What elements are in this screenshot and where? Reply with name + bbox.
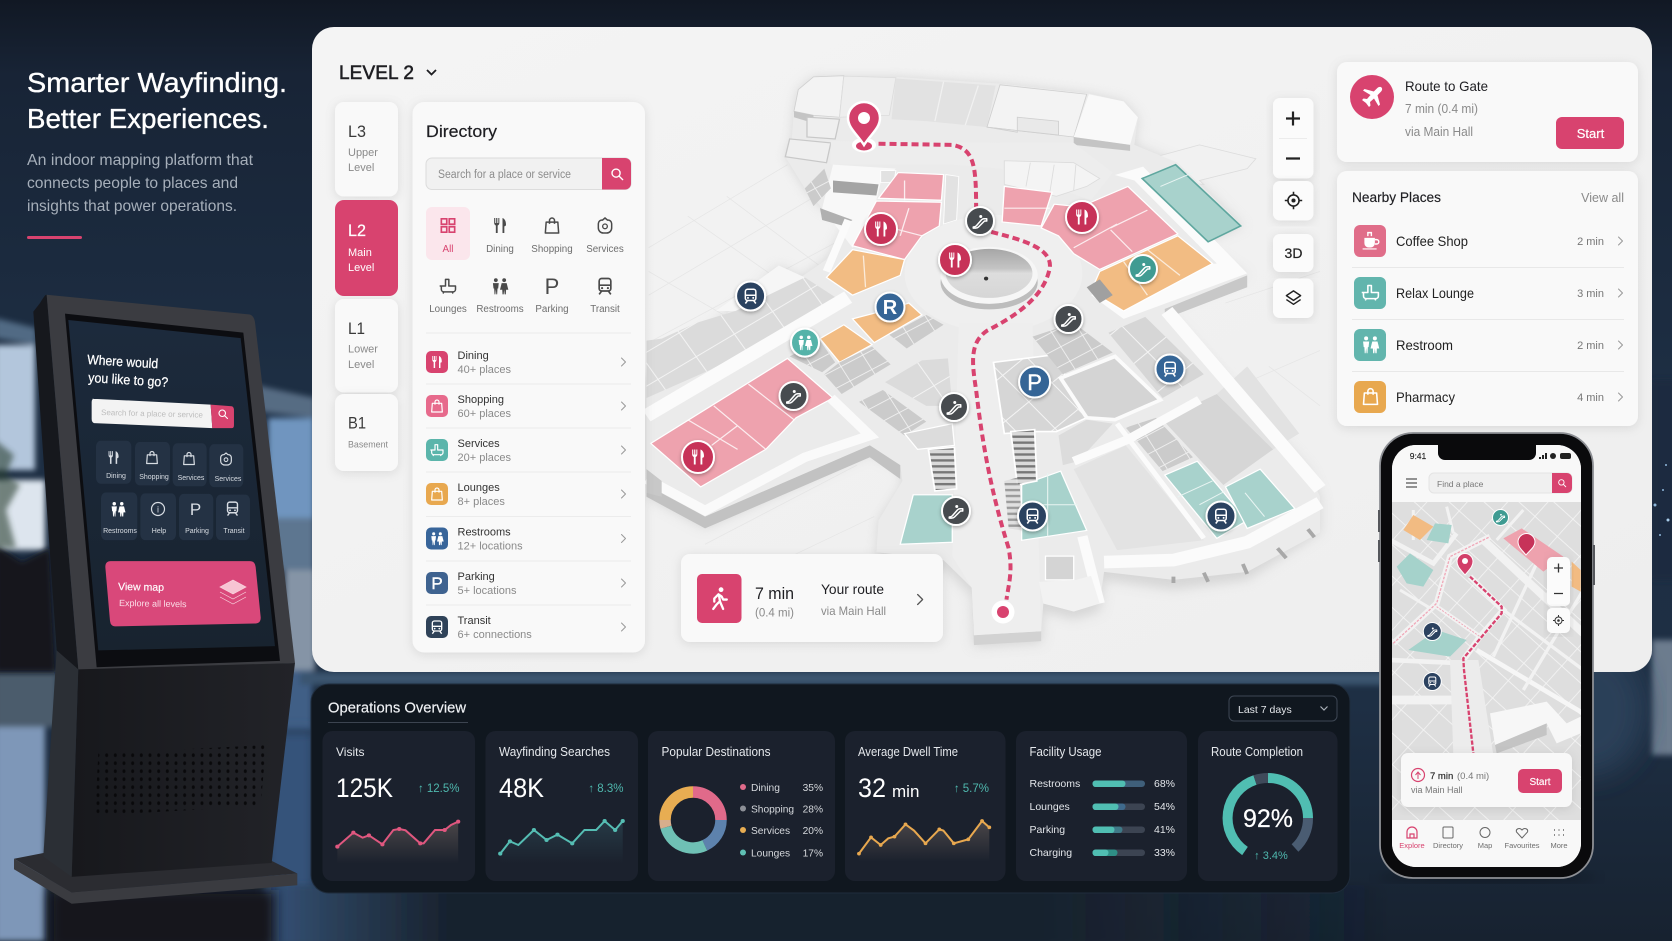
kiosk menu tiles: Shopping — [139, 474, 169, 481]
level L3: Level — [348, 162, 374, 174]
phone tab bar: Favourites — [1504, 841, 1540, 850]
white corridors — [647, 220, 1320, 604]
kiosk menu tiles: Services — [178, 475, 205, 482]
usage bars: Restrooms — [1030, 778, 1080, 790]
directory row: restrooms — [426, 526, 626, 552]
nearby: restroom: Restroom — [1396, 337, 1453, 353]
usage bars: Lounges — [1030, 801, 1070, 813]
card: visits: 125K — [336, 773, 393, 803]
card: popular destinations — [648, 731, 835, 881]
kiosk menu tiles: Transit — [223, 528, 245, 535]
kiosk view map button text: View map — [118, 581, 164, 594]
kiosk view map button text — [118, 581, 187, 609]
card: route completion — [1198, 731, 1338, 881]
sparkline: dwell time — [857, 819, 991, 862]
card: visits: Visits — [336, 745, 364, 759]
kiosk menu tiles: Dining — [106, 473, 126, 480]
description — [27, 152, 254, 215]
destination pin — [848, 102, 880, 152]
donut legend: Services — [751, 826, 790, 837]
card: visits — [322, 731, 475, 881]
category filters: All — [443, 244, 453, 255]
extruded edges — [647, 445, 900, 528]
donut legend: 35% — [803, 783, 823, 794]
directory row: dining — [426, 350, 626, 376]
directory row: shopping — [426, 394, 626, 420]
atrium — [941, 256, 1038, 309]
donut legend: 17% — [803, 848, 823, 860]
usage bars — [1030, 778, 1175, 859]
category filters — [426, 207, 624, 315]
directory row: services: Services — [458, 438, 500, 450]
level L1: L1 — [348, 319, 365, 338]
phone tab bar: Directory — [1433, 841, 1463, 850]
phone mockup — [1377, 433, 1597, 882]
kiosk menu tiles: Restrooms — [103, 528, 137, 535]
kiosk question text: Where would — [87, 352, 159, 371]
card: average dwell time — [845, 731, 1006, 881]
card: wayfinding searches: Wayfinding Searches — [499, 745, 610, 759]
nearby: relax lounge: 3 min — [1577, 288, 1604, 300]
usage bars: 68% — [1154, 778, 1175, 790]
directory row: transit: 6+ connections — [458, 629, 532, 641]
directory row: parking: P — [431, 574, 443, 593]
zoom buttons — [1273, 98, 1314, 178]
map pins: restroom, rideshare, parking, lounge: P — [1027, 370, 1042, 395]
phone header: Find a place — [1437, 479, 1484, 489]
category filters: Shopping — [531, 244, 573, 255]
kiosk menu tiles — [103, 451, 245, 535]
route to gate card: via Main Hall — [1405, 125, 1473, 139]
route to gate card — [1337, 62, 1638, 162]
directory row: transit: Transit — [458, 615, 491, 627]
description: connects people to places and — [27, 175, 238, 192]
kiosk menu tiles: Services — [215, 476, 242, 483]
kiosk search placeholder: Search for a place or service — [101, 408, 204, 420]
level B1: Basement — [348, 440, 388, 450]
phone tab bar — [1392, 820, 1581, 867]
date range dropdown — [1229, 696, 1337, 721]
accent rule — [27, 236, 82, 239]
phone route card — [1401, 753, 1572, 807]
nearby: coffee shop: 2 min — [1577, 236, 1604, 248]
nearby: coffee shop — [1354, 225, 1622, 257]
directory row: restrooms: Restrooms — [458, 526, 511, 538]
3D button: 3D — [1285, 245, 1302, 261]
level B1: B1 — [348, 414, 366, 432]
category filters: P — [545, 274, 559, 299]
category filters: Restrooms — [476, 304, 524, 315]
kiosk view map button text: Explore all levels — [119, 598, 187, 609]
category filters: Transit — [590, 304, 620, 315]
title: Smarter Wayfinding. — [27, 67, 287, 98]
concourse floor — [831, 141, 1113, 200]
locate button — [1273, 181, 1314, 220]
card: route completion: ↑ 3.4% — [1254, 850, 1288, 862]
description: insights that power operations. — [27, 198, 237, 215]
map controls — [1273, 98, 1314, 318]
nearby: relax lounge — [1354, 277, 1622, 309]
top block rooms — [794, 76, 844, 117]
nearby: coffee shop: Coffee Shop — [1396, 233, 1468, 249]
card: route completion: 92% — [1243, 805, 1293, 833]
nearby: pharmacy: 4 min — [1577, 392, 1604, 404]
kiosk menu tiles: i — [157, 504, 159, 514]
phone header — [1392, 445, 1581, 502]
donut legend: Lounges — [751, 848, 790, 860]
map pins: transit — [736, 282, 1236, 530]
nearby: restroom: 2 min — [1577, 340, 1604, 352]
level L2 active: Main — [348, 247, 372, 259]
usage bars: 54% — [1154, 801, 1175, 813]
phone tab bar: Explore — [1399, 841, 1425, 850]
route summary card: (0.4 mi) — [755, 608, 794, 620]
date range dropdown: Last 7 days — [1238, 704, 1292, 716]
phone tab bar: More — [1550, 841, 1568, 850]
directory row: transit — [426, 615, 626, 641]
nearby: pharmacy — [1354, 381, 1622, 413]
route summary card — [681, 554, 943, 642]
phone route card: (0.4 mi) — [1457, 771, 1489, 782]
route summary card: 7 min — [755, 584, 794, 603]
directory row: parking: 5+ locations — [458, 585, 517, 597]
sparkline: visits — [335, 820, 460, 863]
plane icon — [1350, 75, 1394, 119]
title second line: Better Experiences. — [27, 103, 269, 134]
route summary card: via Main Hall — [821, 604, 886, 618]
donut legend: Shopping — [751, 804, 794, 816]
level L2 active — [335, 200, 398, 296]
start button: Start — [1577, 126, 1605, 141]
panel: directory — [412, 102, 645, 652]
kiosk search icon — [219, 410, 228, 418]
card: facility usage — [1016, 731, 1187, 881]
directory row: parking: Parking — [458, 571, 495, 583]
level B1 — [335, 394, 398, 471]
phone route card: 7 min — [1430, 771, 1453, 782]
sparkline: searches — [498, 819, 625, 863]
panel: operations dashboard — [311, 684, 1350, 893]
description: An indoor mapping platform that — [27, 152, 254, 169]
card: average dwell time: Average Dwell Time — [858, 745, 958, 759]
phone map pins — [1423, 510, 1535, 690]
directory row: shopping: 60+ places — [458, 408, 512, 420]
kiosk question text — [87, 352, 169, 390]
map pins: restroom, rideshare, parking, lounge: R — [883, 297, 898, 319]
phone route card: via Main Hall — [1411, 785, 1463, 795]
kiosk layers icon — [220, 580, 246, 604]
card: wayfinding searches: ↑ 8.3% — [588, 783, 624, 795]
category filters: Services — [586, 244, 624, 255]
level L2 active: L2 — [348, 221, 366, 240]
directory row: services: 20+ places — [458, 452, 512, 464]
kiosk menu tiles: P — [190, 500, 201, 519]
gauge — [1228, 778, 1308, 851]
grey room clusters — [647, 277, 835, 398]
card: average dwell time: ↑ 5.7% — [954, 783, 989, 795]
level L2 active: Level — [348, 262, 374, 274]
directory row: services — [426, 438, 626, 464]
nearby places card: Nearby Places — [1352, 189, 1441, 205]
card: average dwell time: min — [892, 782, 919, 801]
chevron — [918, 594, 923, 604]
origin marker — [992, 600, 1014, 624]
directory row: lounges: Lounges — [458, 482, 500, 494]
route to gate card: 7 min (0.4 mi) — [1405, 102, 1478, 116]
floor plan map — [647, 76, 1320, 647]
nearby: relax lounge: Relax Lounge — [1396, 285, 1474, 301]
map pins: restroom, rideshare, parking, lounge — [791, 255, 1157, 398]
directory row: dining: 40+ places — [458, 364, 512, 376]
level heading: LEVEL 2 — [339, 63, 414, 84]
directory row: parking — [426, 571, 626, 597]
nearby places card — [1337, 171, 1638, 426]
route line — [879, 144, 1050, 600]
category filters: Dining — [486, 244, 514, 255]
nearby places card: View all — [1581, 191, 1624, 205]
white corridor round the right wing — [1091, 167, 1247, 319]
donut legend: Dining — [751, 783, 780, 794]
level L1 — [335, 299, 398, 392]
directory search — [426, 158, 631, 190]
card: popular destinations: Popular Destinations — [662, 745, 770, 759]
map pins: dining — [682, 201, 1098, 473]
kiosk menu tiles: Parking — [185, 528, 209, 535]
phone map — [1390, 500, 1583, 823]
start button — [1556, 117, 1624, 149]
phone route card: Start — [1529, 777, 1551, 788]
donut legend: 20% — [803, 826, 823, 837]
level L3 — [335, 102, 398, 196]
usage bars: Parking — [1030, 824, 1065, 836]
directory search: Search for a place or service — [438, 169, 571, 181]
coloured rooms — [651, 173, 1178, 487]
nearby: pharmacy: Pharmacy — [1396, 389, 1455, 405]
kiosk — [14, 295, 297, 904]
card: visits: ↑ 12.5% — [418, 783, 460, 795]
donut legend: 28% — [803, 804, 823, 816]
kiosk question text: you like to go? — [88, 370, 169, 390]
usage bars: 41% — [1154, 824, 1175, 836]
floor level selector — [335, 102, 398, 471]
phone header: 9:41 — [1410, 451, 1427, 461]
panel: indoor map application — [312, 27, 1652, 672]
card: average dwell time: 32 — [858, 773, 886, 803]
layers button — [1273, 278, 1314, 318]
category filters: Parking — [535, 304, 569, 315]
nearby: restroom — [1354, 329, 1622, 361]
kiosk menu tiles: Help — [152, 528, 166, 535]
directory row: lounges: 8+ places — [458, 496, 505, 508]
level L3: Upper — [348, 147, 378, 159]
directory row: shopping: Shopping — [458, 394, 504, 406]
dashboard heading: Operations Overview — [328, 700, 467, 716]
route to gate card: Route to Gate — [1405, 78, 1488, 94]
level L1: Lower — [348, 344, 378, 356]
level L1: Level — [348, 359, 374, 371]
usage bars: Charging — [1030, 847, 1072, 859]
card: route completion: Route Completion — [1211, 745, 1303, 759]
card: facility usage: Facility Usage — [1030, 745, 1102, 759]
map pins: escalators — [780, 207, 1082, 525]
card: wayfinding searches: 48K — [499, 773, 544, 803]
directory row: dining: Dining — [458, 350, 489, 362]
donut legend — [740, 783, 823, 860]
dashboard heading — [328, 700, 468, 723]
phone screen — [1390, 445, 1583, 867]
phone map controls — [1547, 557, 1570, 633]
directory row: restrooms: 12+ locations — [458, 540, 523, 552]
card: wayfinding searches — [486, 731, 638, 881]
usage bars: 33% — [1154, 847, 1175, 859]
category filters: Lounges — [429, 304, 467, 315]
directory heading: Directory — [426, 122, 498, 141]
3D button — [1273, 234, 1314, 272]
phone tab bar: Map — [1478, 841, 1492, 850]
level L3: L3 — [348, 122, 366, 141]
donut chart — [665, 792, 721, 848]
walking icon — [697, 574, 742, 623]
headline block — [27, 67, 287, 239]
directory row: lounges — [426, 482, 626, 508]
route summary card: Your route — [821, 582, 884, 597]
